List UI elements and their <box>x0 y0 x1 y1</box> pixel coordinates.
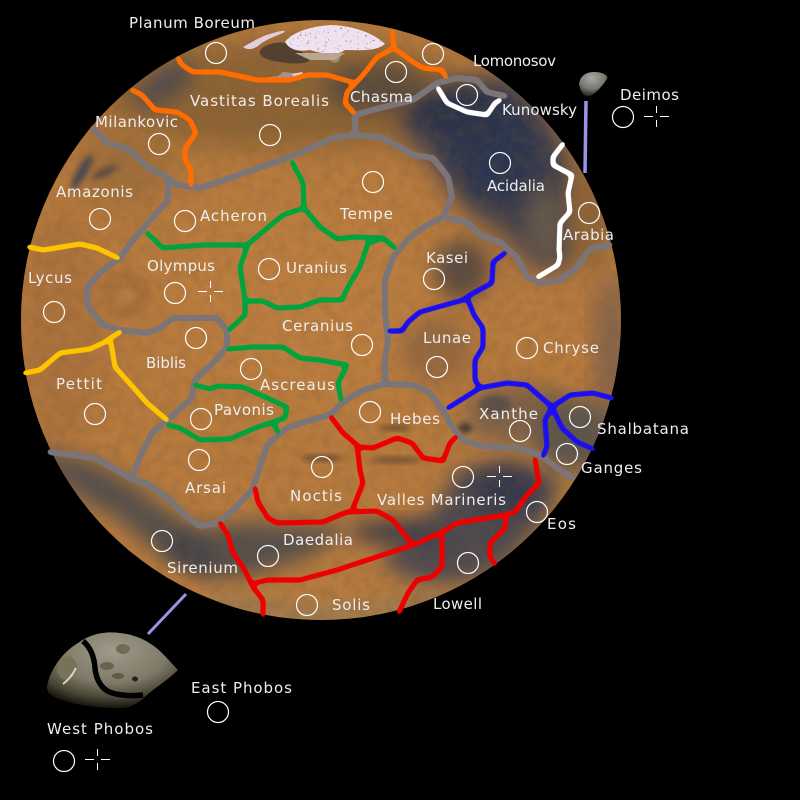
moon: Deimos <box>579 72 607 96</box>
link line to Phobos <box>148 594 186 634</box>
region name labels: Valles Marineris <box>377 491 506 509</box>
region name labels: Daedalia <box>283 531 353 549</box>
region name labels: Acheron <box>200 207 267 225</box>
boundary lines: blue provinces <box>389 253 612 456</box>
boundary lines: green provinces <box>147 162 395 440</box>
region name labels: East Phobos <box>191 679 292 697</box>
region name labels: Ceranius <box>282 317 353 335</box>
region name labels: Xanthe <box>479 405 538 423</box>
region name labels: Amazonis <box>56 183 133 201</box>
boundary lines: white provinces <box>438 88 572 277</box>
region name labels: Olympus <box>147 257 215 275</box>
region name labels: Solis <box>332 596 370 614</box>
crosshair markers <box>85 106 669 770</box>
region name labels: Sirenium <box>167 559 238 577</box>
region name labels: Planum Boreum <box>129 14 255 32</box>
boundary lines: yellow provinces <box>25 244 167 420</box>
region name labels: West Phobos <box>47 720 153 738</box>
region name labels: Hebes <box>390 410 440 428</box>
region name labels: Shalbatana <box>597 420 689 438</box>
link line to Deimos <box>585 101 586 173</box>
boundary lines: orange provinces <box>132 31 446 185</box>
polar ice cap <box>243 25 385 80</box>
region name labels: Ascreaus <box>260 376 335 394</box>
region name labels: Deimos <box>620 86 679 104</box>
infographic: map of Mars regions <box>21 16 688 772</box>
region name labels: Eos <box>547 515 576 533</box>
region name labels: Chryse <box>543 339 599 357</box>
region name labels: Arabia <box>563 226 614 244</box>
boundary lines: grey provinces <box>50 78 610 526</box>
region name labels: Arsai <box>185 479 226 497</box>
region name labels: Lowell <box>433 595 482 613</box>
boundary lines: red provinces <box>220 417 539 615</box>
region name labels: Pettit <box>56 375 102 393</box>
region name labels: Biblis <box>146 354 186 372</box>
Mars globe with surface shading <box>20 20 626 630</box>
region name labels: Acidalia <box>487 177 545 195</box>
region name labels: Kasei <box>426 249 468 267</box>
region name labels: Vastitas Borealis <box>190 92 329 110</box>
region name labels: Lunae <box>423 329 471 347</box>
region name labels: Lomonosov <box>473 52 556 70</box>
region name labels: Milankovic <box>95 113 178 131</box>
region name labels <box>28 14 689 738</box>
region marker circles <box>44 42 634 772</box>
region name labels: Chasma <box>350 88 413 106</box>
moon: Phobos with boundary line <box>47 632 178 708</box>
region name labels: Kunowsky <box>502 101 577 119</box>
region name labels: Ganges <box>581 459 642 477</box>
region name labels: Lycus <box>28 269 72 287</box>
region name labels: Noctis <box>290 487 342 505</box>
region name labels: Tempe <box>339 205 393 223</box>
region name labels: Pavonis <box>214 401 274 419</box>
region name labels: Uranius <box>286 259 347 277</box>
